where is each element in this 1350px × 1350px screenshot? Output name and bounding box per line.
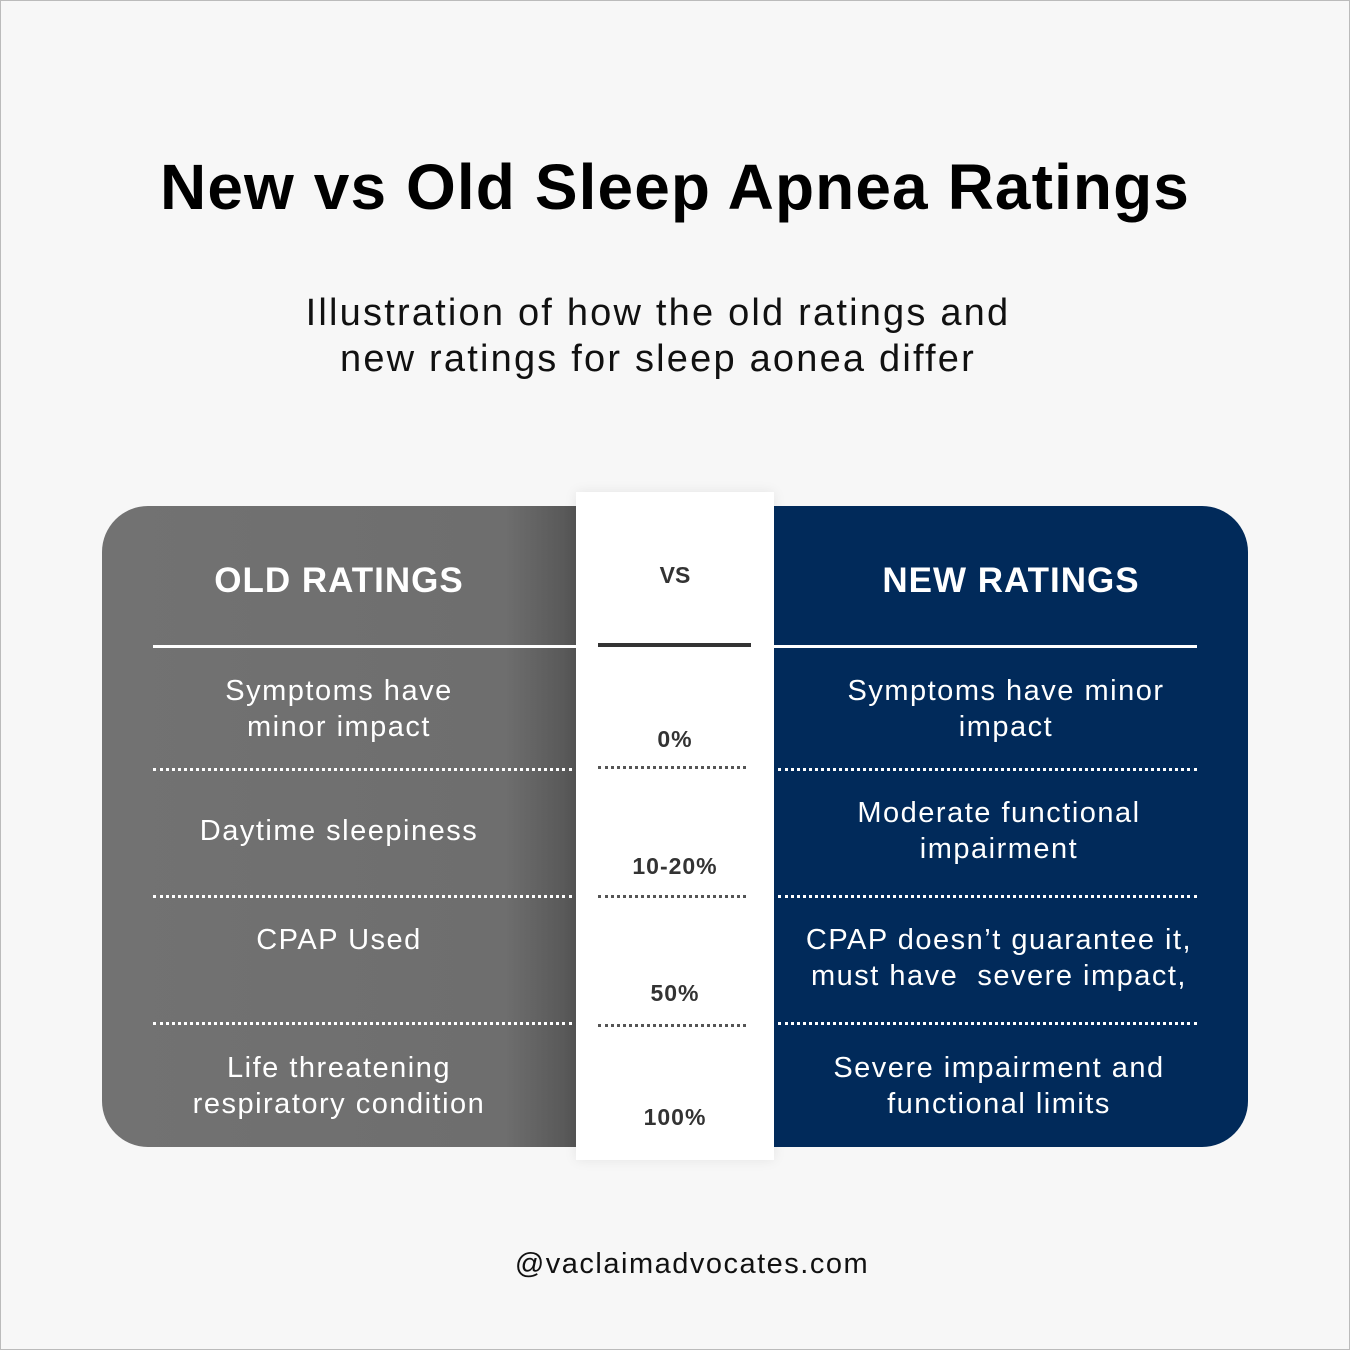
percent 100: 100%	[644, 1104, 706, 1130]
text: old row 2: Daytime sleepiness	[200, 815, 478, 847]
heading: old ratings: OLD RATINGS	[214, 561, 464, 600]
panel: new ratings	[774, 506, 1248, 1147]
text: new row 4: functional limits	[887, 1088, 1111, 1120]
heading: vs: VS	[660, 562, 690, 588]
text: old row 3: CPAP Used	[256, 924, 422, 956]
text: old row 4	[193, 1052, 485, 1120]
text: old row 4: respiratory condition	[193, 1088, 485, 1120]
subtitle	[306, 292, 1010, 380]
text: old row 4: Life threatening	[227, 1052, 451, 1084]
heading: new ratings: NEW RATINGS	[882, 561, 1140, 600]
text: new row 2	[857, 797, 1141, 865]
text: new row 3	[806, 924, 1192, 992]
percent 0: 0%	[657, 726, 693, 752]
text: old row 1: Symptoms have	[225, 675, 453, 707]
text: new row 4	[833, 1052, 1165, 1120]
text: new row 2: Moderate functional	[857, 797, 1141, 829]
text: new row 4: Severe impairment and	[833, 1052, 1165, 1084]
percent 10-20: 10-20%	[632, 853, 718, 879]
text: new row 3: CPAP doesn’t guarantee it,	[806, 924, 1192, 956]
panel: old ratings	[102, 506, 576, 1147]
title: New vs Old Sleep Apnea Ratings	[160, 151, 1190, 223]
text: new row 1	[848, 675, 1164, 743]
text: new row 1: impact	[959, 711, 1053, 743]
footer handle: @vaclaimadvocates.com	[515, 1248, 869, 1280]
panel: vs column	[576, 492, 774, 1160]
text: old row 1	[225, 675, 453, 743]
subtitle: new ratings for sleep aonea differ	[340, 338, 976, 380]
text: old row 1: minor impact	[247, 711, 431, 743]
text: new row 1: Symptoms have minor	[848, 675, 1164, 707]
percent 50: 50%	[650, 980, 700, 1006]
text: new row 3: must have severe impact,	[811, 960, 1187, 992]
text: new row 2: impairment	[920, 833, 1078, 865]
subtitle: Illustration of how the old ratings and	[306, 292, 1010, 334]
